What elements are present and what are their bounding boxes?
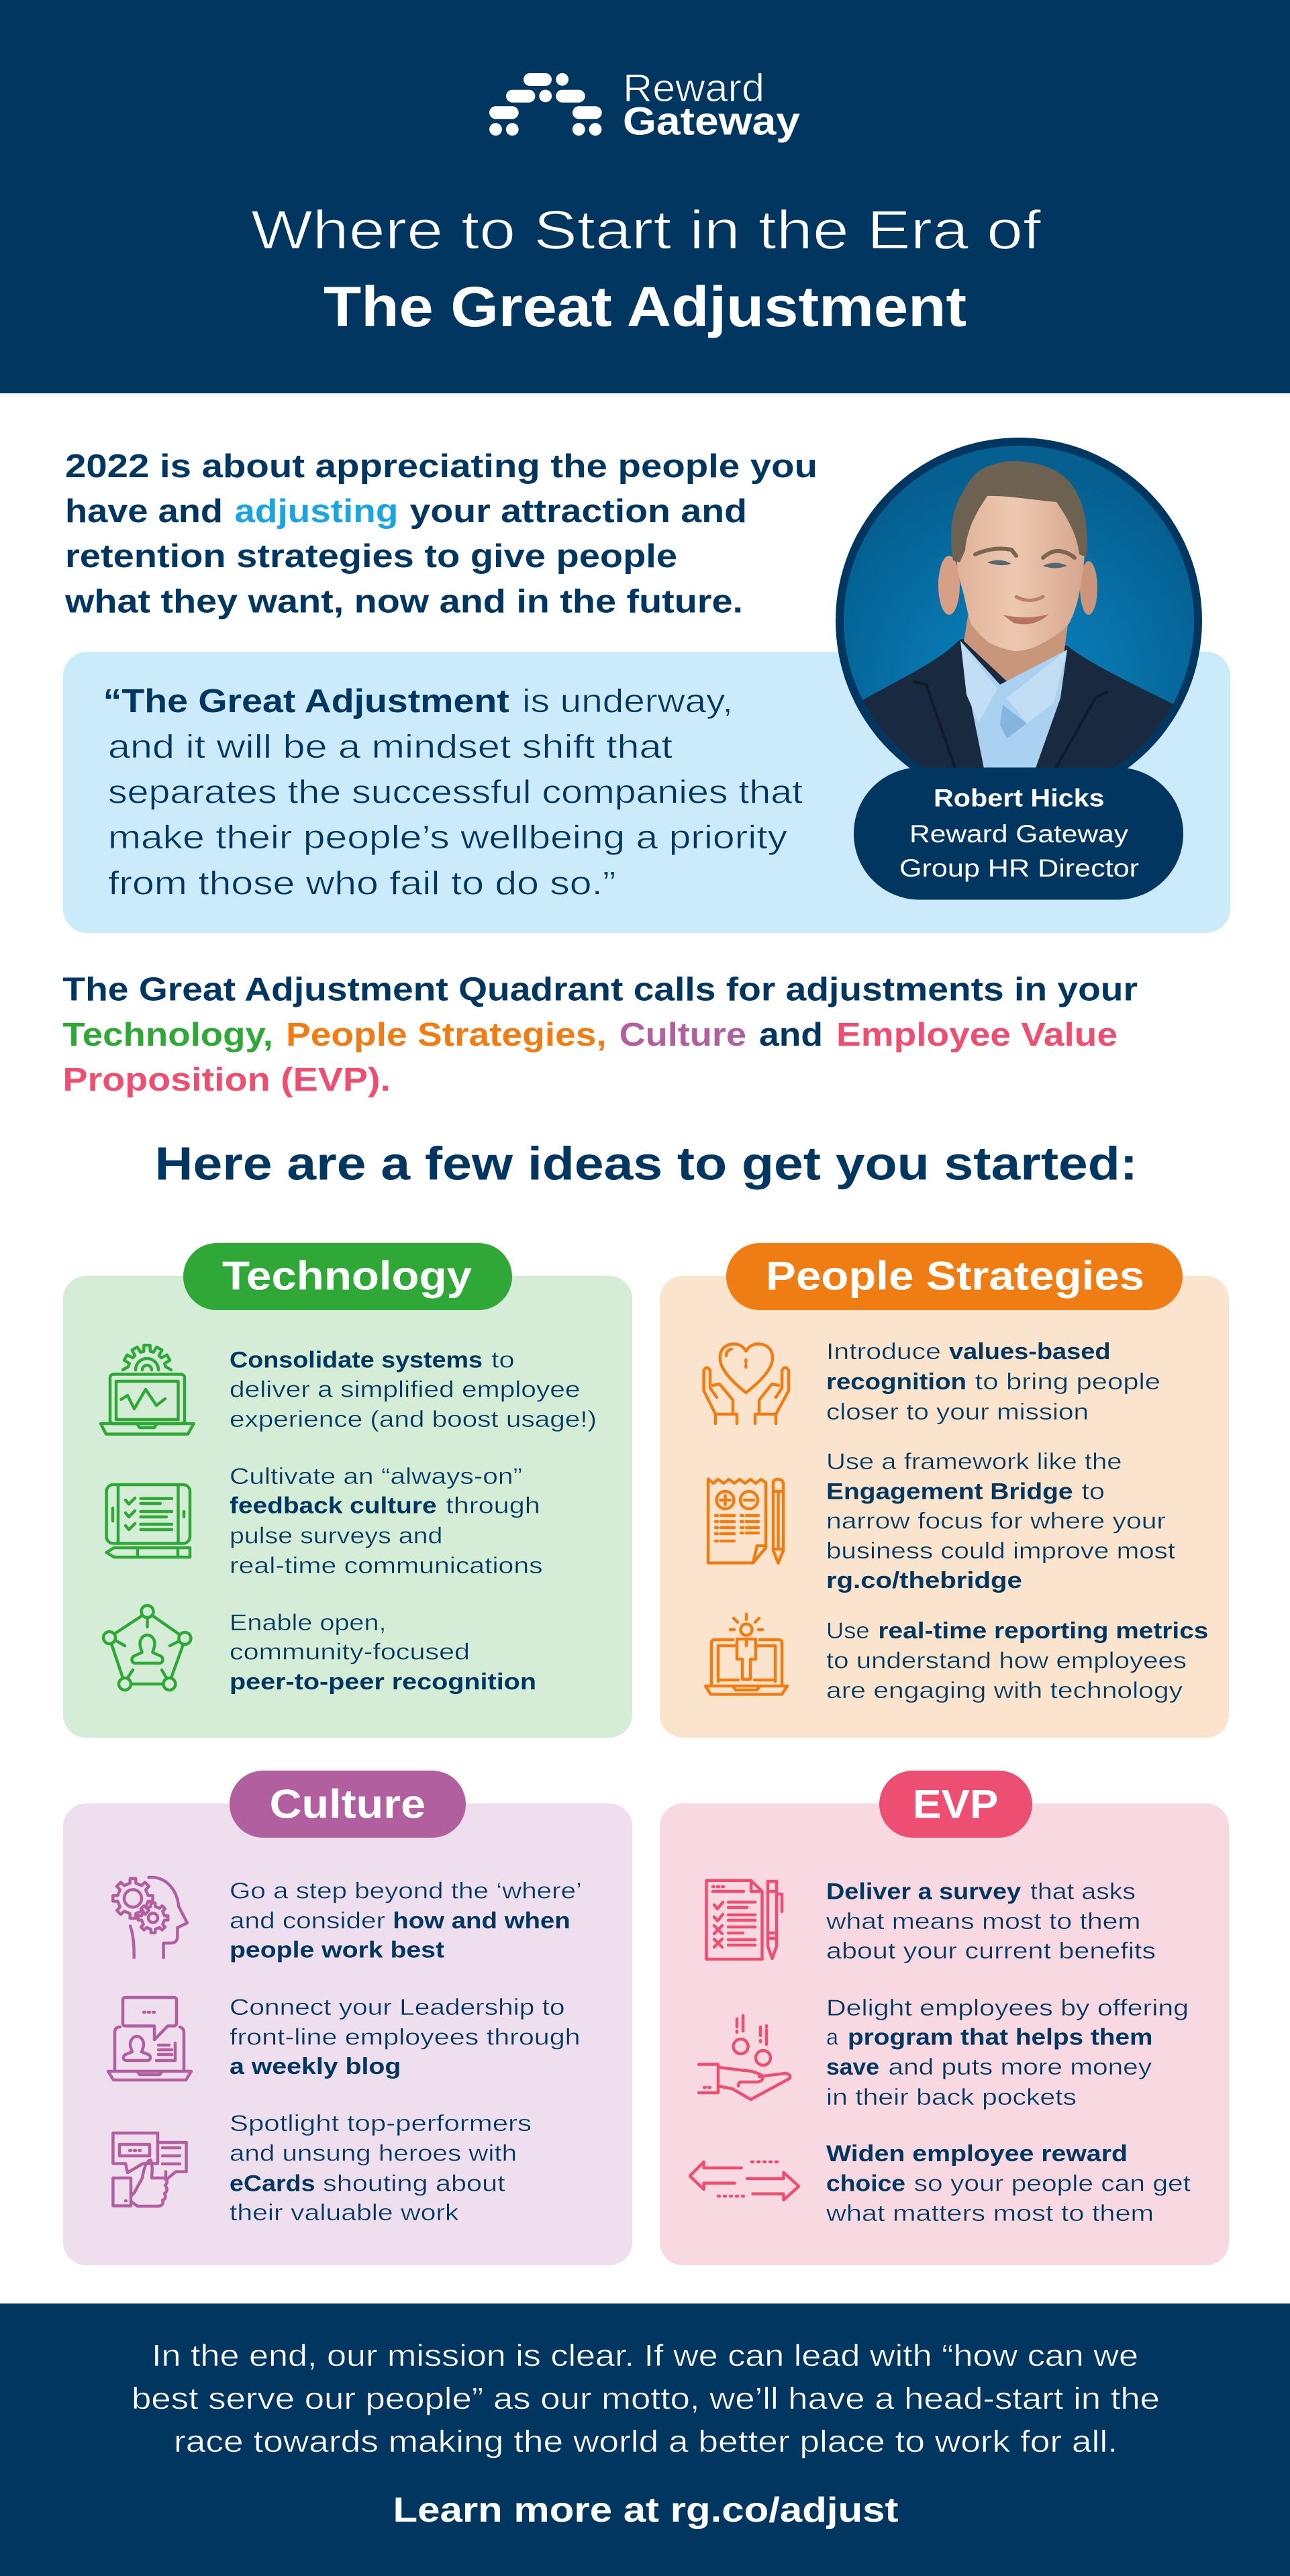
quote text: “The Great Adjustment (103, 683, 509, 720)
closing statement: race towards making the world a better place to work for all. (174, 2424, 1118, 2459)
item text: reporting metrics: to understand how employees (826, 1648, 1187, 1674)
quadrant intro text: Employee Value (836, 1017, 1118, 1053)
item text: values-based recognition: to bring people (975, 1369, 1160, 1395)
quote text: and it will be a mindset shift that (108, 729, 673, 765)
item text: eCards: and unsung heroes with (230, 2141, 517, 2167)
intro statement: retention strategies to give people (65, 538, 677, 575)
call to action: Learn more at rg.co/adjust (393, 2491, 898, 2530)
logo wordmark (623, 66, 800, 144)
neck (964, 614, 1068, 681)
item text: reward choice: choice (826, 2171, 905, 2197)
item text: engagement bridge (826, 1449, 1176, 1593)
item text: eCards: Spotlight top-performers (230, 2111, 532, 2136)
item text: engagement bridge: to (1081, 1479, 1105, 1505)
title: The Great Adjustment (324, 275, 966, 338)
panel: EVP (660, 1771, 1229, 2265)
item text: feedback culture: real-time communications (230, 1553, 543, 1579)
item text: how and when: people work best (230, 1938, 444, 1963)
logo wordmark: Gateway (623, 100, 800, 144)
item text: engagement bridge: business could improve most (826, 1538, 1176, 1564)
icon: exchange arrows (690, 2162, 799, 2200)
item text: peer recognition (230, 1610, 536, 1695)
item text: deliver a survey (826, 1879, 1156, 1964)
item text: feedback culture: feedback culture (230, 1493, 437, 1518)
item text: consolidate systems: experience (and boost usage!) (230, 1407, 597, 1432)
item text: values-based recognition: values-based (949, 1339, 1111, 1365)
quadrant intro text: Technology, (62, 1017, 273, 1053)
icon: person on laptop (705, 1614, 787, 1694)
panel: Culture (63, 1771, 632, 2265)
EVP pill heading (879, 1771, 1032, 1838)
item text: feedback culture (230, 1464, 543, 1579)
item text: reporting metrics: Use (826, 1618, 870, 1644)
header band (0, 0, 1290, 393)
item text: values-based recognition: Introduce (826, 1339, 941, 1365)
item text: reporting metrics: real-time reporting metrics (878, 1618, 1208, 1644)
item text: reporting metrics (826, 1618, 1208, 1703)
icon: laptop with speech bubble (108, 1997, 191, 2080)
name pill: Group HR Director (899, 854, 1139, 882)
item text: feedback culture: through (446, 1493, 540, 1518)
logo wordmark: Reward (623, 66, 764, 110)
quadrant intro text: and (759, 1017, 823, 1053)
jacket (863, 639, 1173, 768)
item text: peer recognition: peer-to-peer recognition (230, 1669, 536, 1695)
closing statement: In the end, our mission is clear. If we can lead with “how can we (152, 2338, 1138, 2373)
Culture pill heading: Culture (270, 1782, 426, 1827)
eyes (987, 560, 1067, 568)
eyebrows (975, 549, 1075, 558)
item text: eCards: eCards (230, 2171, 315, 2197)
quote text: make their people’s wellbeing a priority (108, 820, 788, 856)
shirt (960, 641, 1067, 772)
item text: savings program: program that helps them (848, 2025, 1153, 2050)
item text: savings program (826, 1995, 1189, 2110)
item text: savings program: save (826, 2054, 879, 2080)
item text: reward choice: so your people can get (914, 2171, 1191, 2197)
item text: eCards (230, 2111, 532, 2226)
ears (938, 556, 960, 615)
item text: values-based recognition: recognition (826, 1369, 966, 1395)
intro statement (64, 448, 817, 620)
People Strategies pill heading (726, 1243, 1183, 1310)
quadrant intro text: The Great Adjustment Quadrant calls for adjustments in your (62, 972, 1138, 1008)
item text: how and when: and consider (230, 1908, 385, 1934)
item text: consolidate systems: deliver a simplified employee (230, 1377, 580, 1402)
face (956, 487, 1085, 651)
item text: savings program: Delight employees by offering (826, 1995, 1189, 2021)
item text: how and when: Go a step beyond the ‘where’ (230, 1878, 582, 1903)
item text: values-based recognition: closer to your mission (826, 1399, 1089, 1425)
name pill: Robert Hicks (934, 785, 1105, 812)
logo mark (489, 73, 602, 136)
panel: quote (63, 652, 1230, 933)
quadrant intro text: Culture (619, 1017, 746, 1053)
intro statement: have and (65, 493, 223, 530)
panel: People Strategies (660, 1243, 1229, 1738)
item text: savings program: and puts more money (889, 2054, 1152, 2080)
item text: deliver a survey: what means most to them (826, 1909, 1141, 1934)
quadrant intro text: Proposition (EVP). (62, 1062, 391, 1098)
mouth (1003, 614, 1049, 624)
footer band (0, 2303, 1290, 2576)
icon: survey and pen (706, 1881, 782, 1959)
intro statement: 2022 is about appreciating the people you (65, 448, 817, 485)
quote text: from those who fail to do so.” (108, 866, 615, 902)
item text: engagement bridge: Use a framework like the (826, 1449, 1122, 1475)
quadrant intro text: People Strategies, (286, 1017, 607, 1053)
item text: savings program: a (826, 2025, 838, 2050)
icon: thumbs up and speech bubbles (113, 2133, 187, 2206)
intro statement: what they want, now and in the future. (64, 584, 743, 620)
icon: head with gears (113, 1877, 187, 1958)
icon: tablet checklist (107, 1485, 190, 1557)
item text: weekly blog: Connect your Leadership to (230, 1995, 565, 2020)
item text: weekly blog: front-line employees through (230, 2025, 581, 2050)
item text: weekly blog (230, 1995, 581, 2079)
logo: Reward Gateway (489, 66, 800, 144)
quadrant intro text (62, 972, 1138, 1098)
item text: eCards: shouting about (323, 2171, 505, 2197)
item text: reporting metrics: are engaging with technology (826, 1678, 1183, 1703)
icon: coins into hand (699, 2016, 790, 2099)
item text: reward choice (826, 2141, 1191, 2226)
intro statement: your attraction and (409, 493, 747, 530)
icon: heart in hands (704, 1344, 789, 1424)
item text: consolidate systems: to (491, 1347, 514, 1373)
Technology pill heading: Technology (222, 1253, 473, 1298)
Culture pill heading (230, 1771, 466, 1838)
item text: values-based recognition (826, 1339, 1160, 1425)
quote text (103, 683, 803, 902)
intro statement: adjusting (234, 493, 398, 530)
EVP pill heading: EVP (913, 1782, 998, 1827)
title: Where to Start in the Era of (251, 200, 1041, 260)
quote text: separates the successful companies that (108, 775, 803, 811)
item text: feedback culture: pulse surveys and (230, 1524, 442, 1549)
item text: peer recognition: community-focused (230, 1640, 470, 1665)
item text: engagement bridge: Engagement Bridge (826, 1479, 1073, 1505)
hair (951, 461, 1087, 562)
name pill (854, 768, 1183, 899)
item text: reward choice: what matters most to them (826, 2201, 1154, 2226)
Technology pill heading (183, 1243, 512, 1310)
heading: ideas: Here are a few ideas to get you started: (155, 1138, 1138, 1190)
item text: feedback culture: Cultivate an “always-on” (230, 1464, 522, 1489)
panel: Technology (63, 1243, 632, 1738)
item text: savings program: in their back pockets (826, 2085, 1077, 2110)
item text: deliver a survey: about your current benefits (826, 1938, 1156, 1964)
name pill: Reward Gateway (909, 820, 1129, 848)
item text: deliver a survey: that asks (1030, 1879, 1136, 1904)
item text: weekly blog: a weekly blog (230, 2054, 401, 2079)
item text: consolidate systems: Consolidate systems (230, 1347, 483, 1373)
icon: laptop with gear (101, 1345, 194, 1434)
icon: plus minus receipt and pencil (708, 1479, 783, 1563)
closing statement: best serve our people” as our motto, we’ll have a head-start in the (132, 2381, 1160, 2416)
nose (1016, 597, 1043, 600)
item text: how and when (230, 1878, 582, 1963)
item text: reward choice: Widen employee reward (826, 2141, 1128, 2167)
People Strategies pill heading: People Strategies (766, 1253, 1144, 1298)
item text: eCards: their valuable work (230, 2200, 460, 2226)
item text: engagement bridge: rg.co/thebridge (826, 1568, 1022, 1593)
item text: engagement bridge: narrow focus for where your (826, 1509, 1166, 1534)
item text: consolidate systems (230, 1347, 597, 1432)
title (251, 200, 1041, 338)
item text: deliver a survey: Deliver a survey (826, 1879, 1021, 1904)
icon: peer network (103, 1605, 191, 1690)
item text: how and when: how and when (393, 1908, 570, 1934)
closing statement (132, 2338, 1160, 2459)
quote text: is underway, (522, 683, 733, 720)
item text: peer recognition: Enable open, (230, 1610, 387, 1636)
portrait photo: Robert Hicks (836, 438, 1202, 769)
